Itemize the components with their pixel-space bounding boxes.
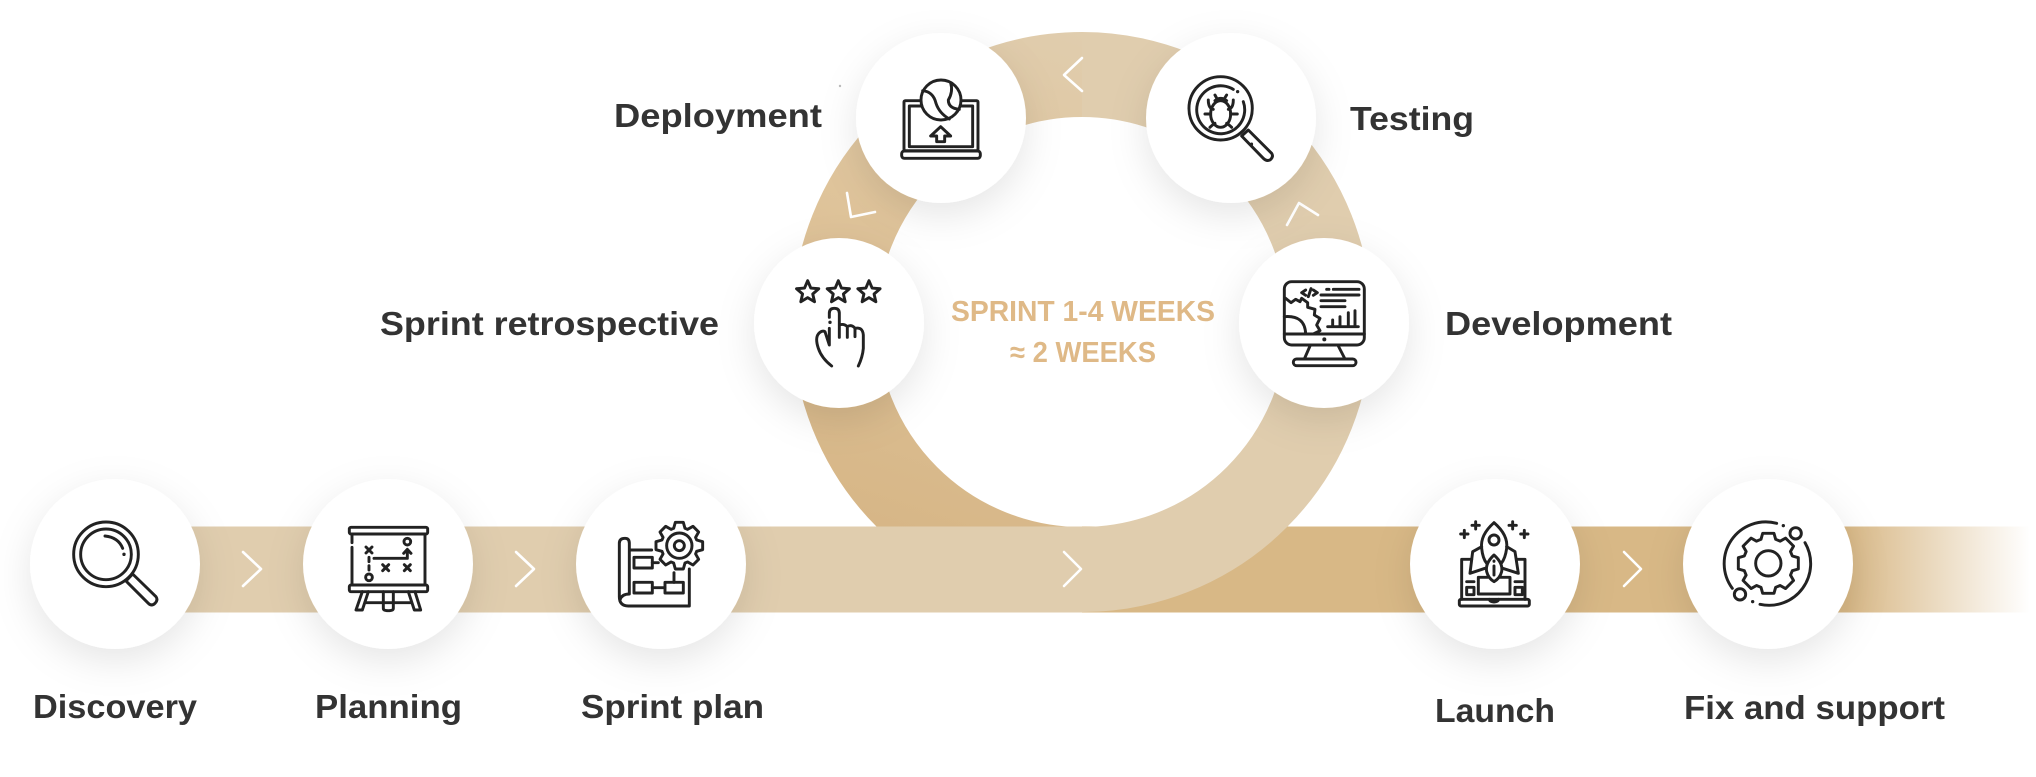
node: sprint plan — [576, 479, 746, 649]
small speck — [839, 85, 841, 87]
icon: monitor with code and gear — [1284, 282, 1364, 366]
icon: stars and hand — [797, 281, 880, 366]
arrow: development to testing — [1287, 203, 1318, 225]
label: planning: Planning — [315, 688, 462, 725]
center text: sprint length — [951, 296, 1215, 369]
label: sprint plan: Sprint plan — [581, 688, 764, 725]
icon: tactics board — [349, 527, 428, 611]
arrow: planning to sprint plan — [516, 552, 534, 586]
left bar: light segment — [115, 526, 1082, 612]
node: planning — [303, 479, 473, 649]
center text: sprint length: ≈ 2 WEEKS — [1010, 337, 1156, 369]
node: discovery — [30, 479, 200, 649]
node: fix and support — [1683, 479, 1853, 649]
label: development: Development — [1445, 305, 1672, 342]
node: launch — [1410, 479, 1580, 649]
ring: left arc — [835, 74, 1082, 570]
arrow: discovery to planning — [243, 552, 261, 586]
label: fix and support: Fix and support — [1684, 689, 1945, 726]
arrow: testing to deployment — [1064, 58, 1082, 91]
node: deployment — [856, 33, 1026, 203]
ring: right arc — [1082, 74, 1330, 570]
label: launch: Launch — [1435, 692, 1555, 729]
node: development — [1239, 238, 1409, 408]
icon: laptop with globe — [902, 80, 980, 158]
icon: rocket and laptop — [1459, 522, 1529, 606]
arrow: sprint into cycle — [1064, 552, 1081, 586]
icon: gear with orbit — [1724, 522, 1811, 605]
icon: bug under magnifier — [1189, 77, 1272, 161]
arrow: deployment to retrospective — [847, 193, 875, 217]
label: discovery: Discovery — [33, 688, 198, 725]
node: sprint retrospective — [754, 238, 924, 408]
label: sprint retrospective: Sprint retrospective — [380, 305, 719, 342]
icon: blueprint and gear — [619, 522, 703, 606]
arrow: launch to fix and support — [1624, 552, 1641, 586]
center text: sprint length: SPRINT 1-4 WEEKS — [951, 296, 1215, 328]
label: testing: Testing — [1350, 100, 1474, 137]
icon: magnifier — [74, 522, 157, 605]
label: deployment: Deployment — [614, 97, 822, 134]
node: testing — [1146, 33, 1316, 203]
right bar: dark segment fading out — [1040, 526, 2036, 612]
